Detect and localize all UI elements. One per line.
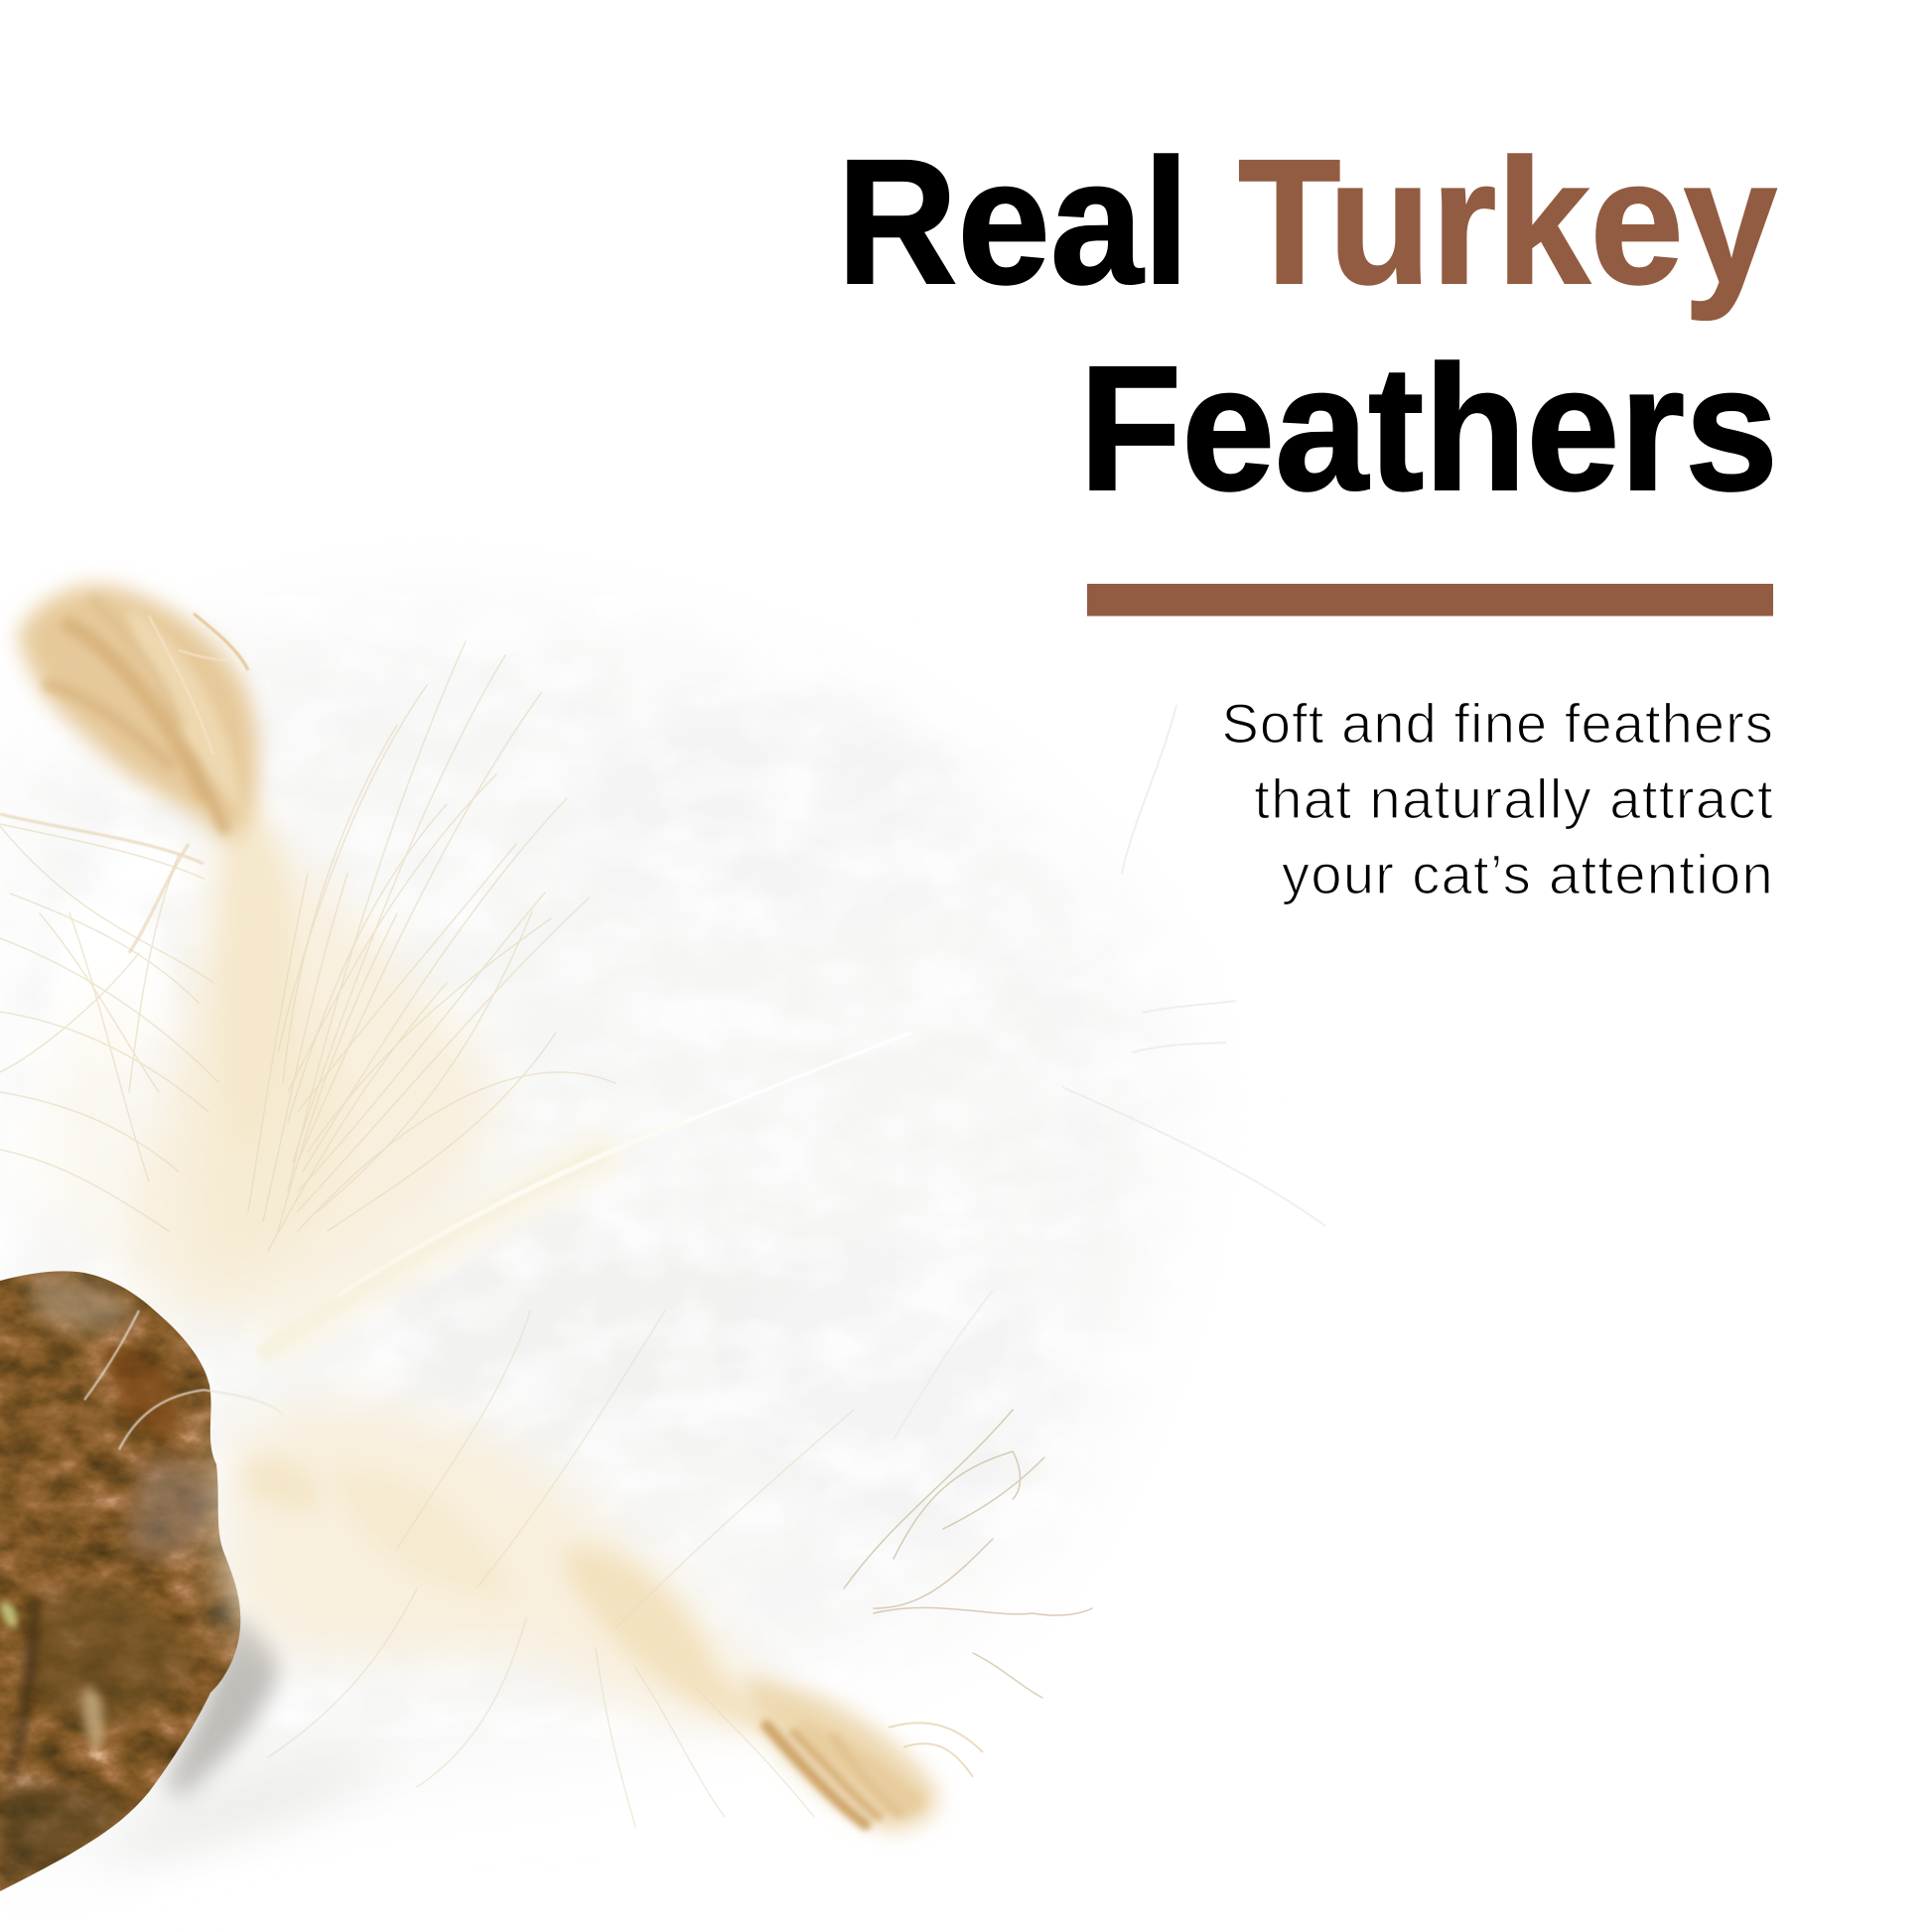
lower fine dark wisps [844,1410,1092,1698]
divider bar [1087,584,1773,616]
shadow under the ball [89,1613,397,1866]
lower feather strands [268,1311,854,1827]
title [837,122,1778,527]
title line 1: Real [837,122,1189,321]
lower tan feather tip [744,1678,983,1832]
title line 2: Feathers [1079,329,1778,527]
description text: Soft and fine feathers [1221,692,1774,755]
description text: your cat’s attention [1282,843,1774,905]
catnip ball [0,1261,283,1906]
photo: catnip ball with turkey feather [0,585,1325,1906]
top-left tan feather tip [0,585,258,953]
upper feather strands [0,641,616,1251]
upper cream feather fluff [44,774,495,1321]
title accent word: Turkey [1238,122,1777,321]
feather shaft [260,1033,911,1356]
description text: that naturally attract [1254,767,1774,830]
white feather soft body [0,596,1325,1866]
lower cream feather fluff [226,1404,784,1732]
description text [1221,692,1774,905]
